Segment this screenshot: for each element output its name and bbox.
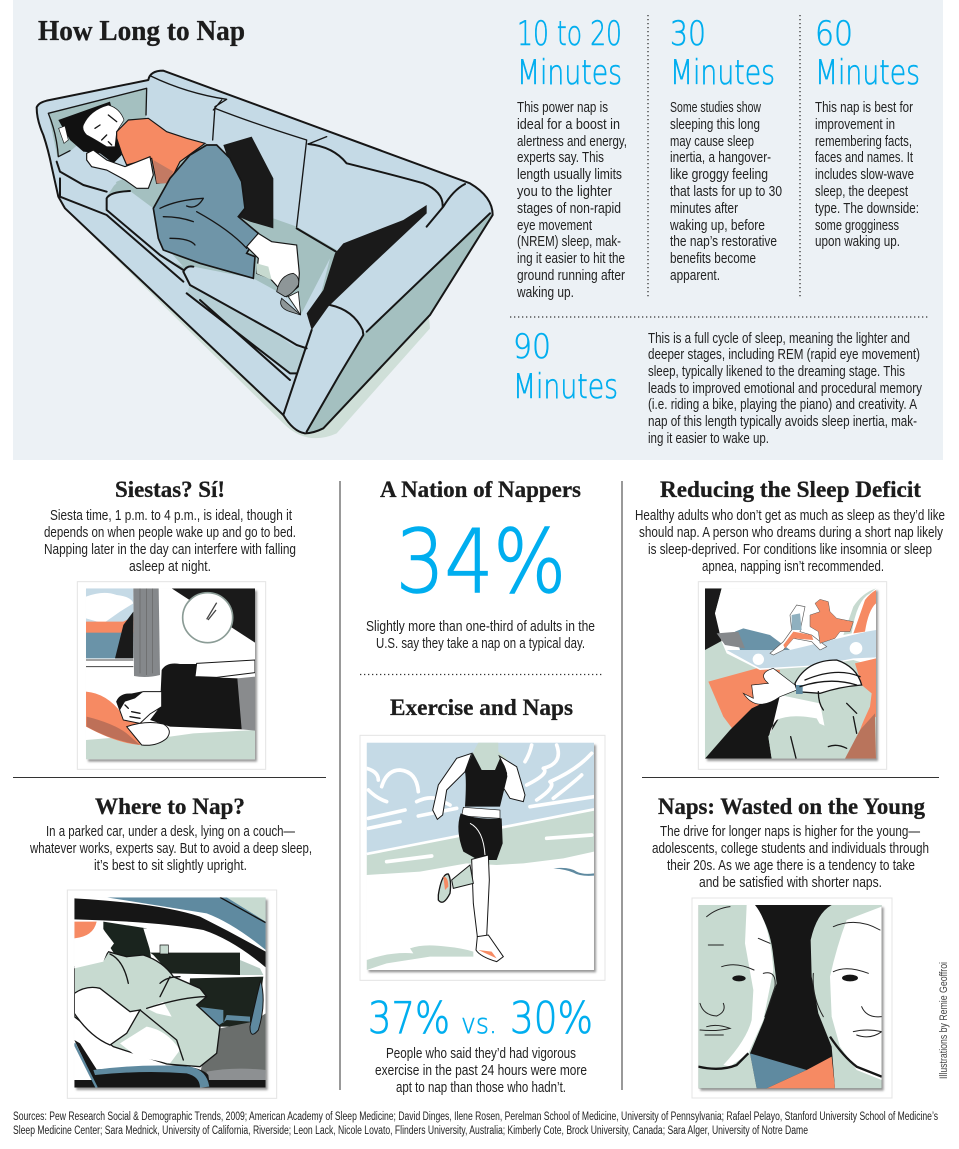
column: 10 to 20 minutes: waking up.	[516, 285, 574, 301]
illustration: woman dreaming	[698, 582, 887, 769]
text: nation of nappers: Slightly more than one-third of adults in the	[366, 619, 595, 635]
title: How Long to Nap	[38, 15, 245, 47]
text: siestas: asleep at night.	[129, 559, 211, 575]
black cushion	[223, 137, 273, 228]
text: where to nap: In a parked car, under a desk, lying on a couch—	[46, 824, 295, 840]
column: 30 minutes: like groggy feeling	[670, 167, 768, 183]
column: 30 minutes: apparent.	[670, 268, 720, 284]
heading: reducing the sleep deficit: Reducing the Sleep Deficit	[660, 477, 921, 502]
column: 30 minutes: the nap’s restorative	[670, 234, 777, 250]
column: 10 to 20 minutes: 10 to 20	[517, 14, 622, 54]
panel: siestas	[44, 477, 296, 769]
column: 60 minutes: Minutes	[815, 53, 920, 93]
panel: reducing the sleep deficit	[635, 477, 945, 769]
panel: naps wasted on the young	[652, 794, 929, 1098]
heading: exercise and naps: Exercise and Naps	[390, 695, 573, 720]
column: 10 to 20 minutes: (NREM) sleep, mak-	[517, 234, 621, 250]
shirt	[117, 118, 205, 183]
text: naps wasted on the young	[652, 824, 929, 891]
column: 60 minutes: faces and names. It	[815, 150, 913, 166]
text: naps wasted on the young: and be satisfied with shorter naps.	[699, 875, 882, 891]
column: 10 to 20 minutes: stages of non-rapid	[517, 201, 621, 217]
text: siestas: Napping later in the day can interfere with falling	[44, 542, 296, 558]
text: exercise and naps: apt to nap than those who hadn’t.	[396, 1080, 566, 1096]
heading: siestas: Siestas? Sí!	[115, 477, 225, 502]
text: exercise and naps: exercise in the past 24 hours were more	[375, 1063, 587, 1079]
text: where to nap: it’s best to sit slightly upright.	[94, 858, 247, 874]
sock	[247, 233, 299, 297]
column: 60 minutes: sleep, the deepest	[815, 184, 908, 200]
text: exercise and naps: People who said they’d had vigorous	[386, 1046, 576, 1062]
column: 60 minutes: upon waking up.	[815, 234, 900, 250]
column: 90 minutes: Minutes	[513, 367, 618, 407]
text: siestas: depends on when people wake up and go to bed.	[44, 525, 296, 541]
sources	[13, 1111, 938, 1137]
column: 90 minutes: ing it easier to wake up.	[648, 431, 769, 447]
arm	[87, 150, 153, 188]
column: 30 minutes: that lasts for up to 30	[670, 184, 782, 200]
column: 30 minutes: benefits become	[670, 251, 756, 267]
column: 10 to 20 minutes: ideal for a boost in	[517, 117, 620, 133]
text: siestas	[44, 508, 296, 575]
text: where to nap: whatever works, experts say. But to avoid a deep sleep,	[29, 841, 312, 857]
column: 30 minutes: waking up, before	[669, 218, 765, 234]
column: 60 minutes: improvement in	[815, 117, 895, 133]
hand on pillow	[59, 126, 68, 143]
pillow	[58, 102, 122, 163]
stat: 34 percent: 34%	[396, 511, 566, 613]
column: 60 minutes: 60	[815, 14, 853, 54]
column: 30 minutes: minutes after	[670, 201, 738, 217]
column: 90 minutes: 90	[513, 327, 551, 367]
panel: a nation of nappers	[366, 477, 595, 652]
column: 60 minutes	[815, 14, 920, 250]
column: 10 to 20 minutes: alertness and energy,	[517, 134, 627, 150]
illustration: old and young faces	[692, 898, 892, 1098]
column: 10 to 20 minutes: This power nap is	[517, 100, 608, 116]
stat: 37 percent vs 30 percent: vs.	[461, 1007, 497, 1040]
panel: how long to nap	[13, 0, 943, 460]
column: 10 to 20 minutes: experts say. This	[517, 150, 604, 166]
column: 60 minutes: remembering facts,	[815, 134, 912, 150]
column: 60 minutes: some grogginess	[815, 218, 899, 234]
column: 60 minutes: This nap is best for	[815, 100, 913, 116]
column: 90 minutes	[513, 327, 923, 447]
heading: a nation of nappers: A Nation of Nappers	[380, 477, 581, 502]
column: 30 minutes	[669, 14, 782, 284]
stat: 37 percent vs 30 percent: 37%	[368, 993, 450, 1044]
text: sleep deficit	[635, 508, 945, 575]
illustration: man sleeping in a car	[67, 890, 277, 1098]
illustration: man sleeping on sofa	[37, 71, 493, 438]
text: sleep deficit: apnea, napping isn’t recommended.	[702, 559, 884, 575]
column: 10 to 20 minutes: ing it easier to hit the	[517, 251, 625, 267]
text: exercise and naps	[375, 1046, 587, 1096]
black blanket	[307, 205, 427, 330]
column: 60 minutes: includes slow-wave	[815, 167, 914, 183]
column: 10 to 20 minutes: you to the lighter	[517, 184, 612, 200]
column: 60 minutes: type. The downside:	[815, 201, 919, 217]
column: 10 to 20 minutes: eye movement	[517, 218, 592, 234]
credit: illustrator: Illustrations by Remie Geoffroi	[938, 962, 950, 1079]
column: 30 minutes: may cause sleep	[670, 134, 754, 150]
text: nation of nappers	[366, 619, 595, 652]
text: nation of nappers: U.S. say they take a nap on a typical day.	[376, 636, 585, 652]
sofa outlines	[37, 71, 493, 433]
illustration: man napping under a clock	[77, 582, 266, 769]
heading: where to nap: Where to Nap?	[95, 794, 245, 819]
shoe soles	[277, 273, 299, 297]
column: 30 minutes: sleeping this long	[670, 117, 760, 133]
heading: naps wasted on the young: Naps: Wasted on the Young	[658, 794, 925, 819]
panel: where to nap	[29, 794, 312, 1098]
column: 10 to 20 minutes: ground running after	[517, 268, 625, 284]
column: 30 minutes: 30	[670, 14, 706, 54]
column: 10 to 20 minutes: length usually limits	[517, 167, 622, 183]
column: 10 to 20 minutes	[516, 14, 627, 301]
head	[83, 105, 124, 147]
panel: exercise and naps	[360, 695, 605, 1096]
column: 10 to 20 minutes: Minutes	[517, 53, 622, 93]
text: siestas: Siesta time, 1 p.m. to 4 p.m., is ideal, though it	[50, 508, 292, 524]
trousers	[153, 145, 258, 278]
column: 30 minutes: Some studies show	[670, 100, 761, 116]
column: 30 minutes: Minutes	[670, 53, 775, 93]
stat: 37 percent vs 30 percent: 30%	[510, 993, 593, 1044]
column: 30 minutes: inertia, a hangover-	[670, 150, 771, 166]
text: where to nap	[29, 824, 312, 874]
stat: 37 percent vs 30 percent	[368, 993, 593, 1044]
illustration: runner on the beach	[360, 735, 605, 980]
